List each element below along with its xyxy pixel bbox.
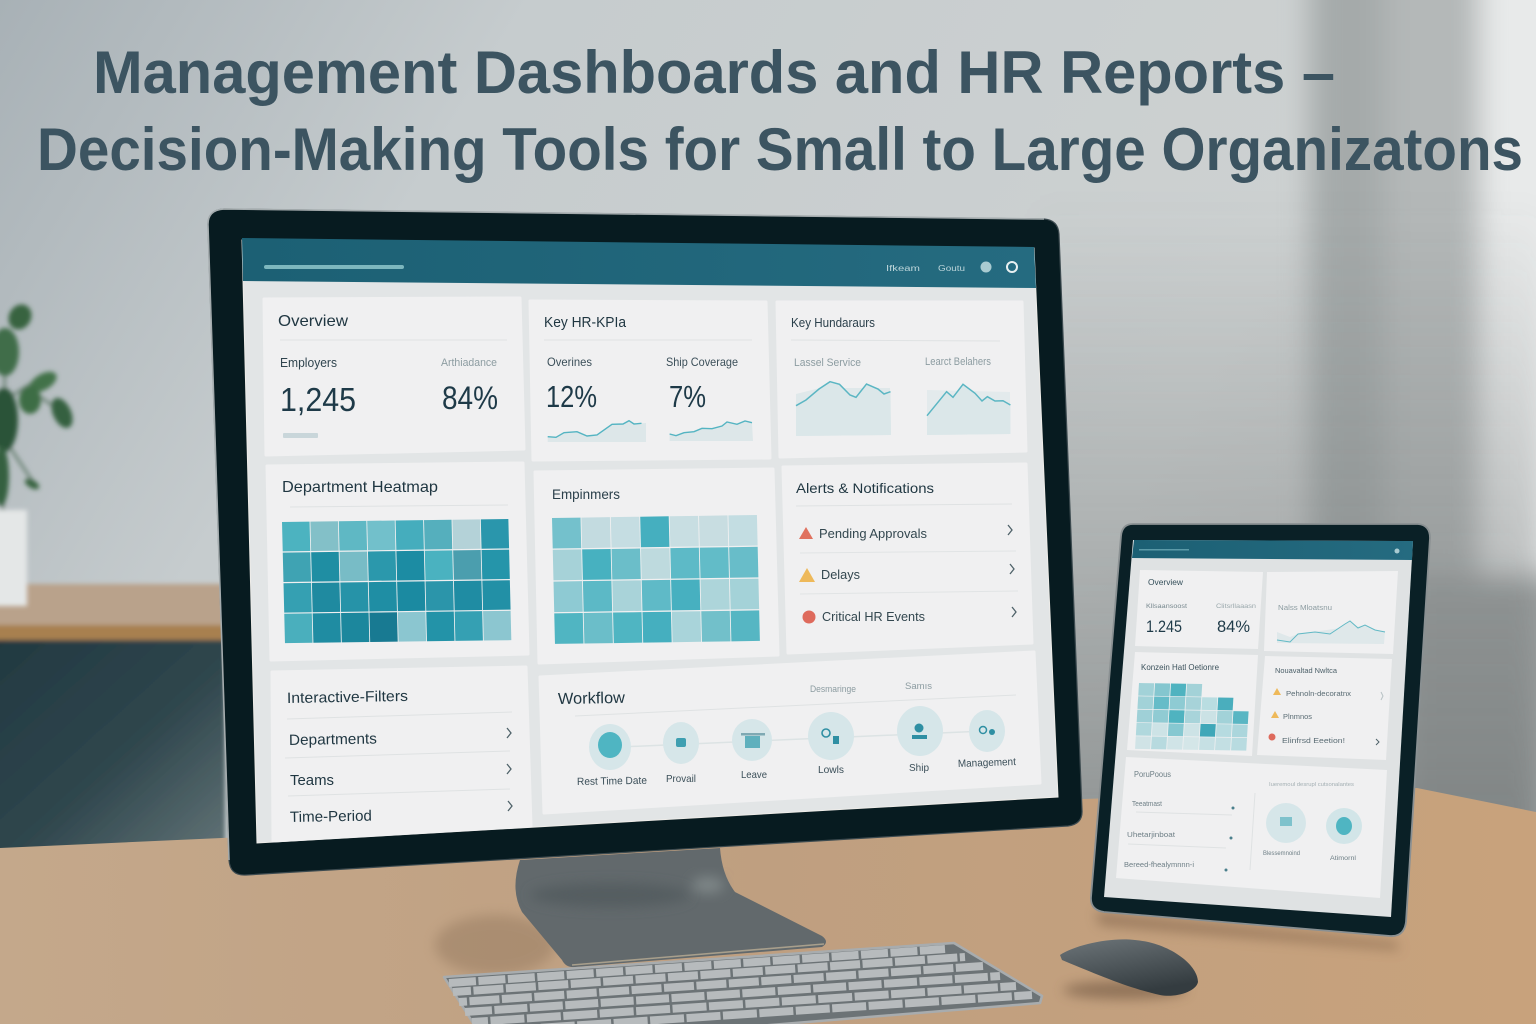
tablet panel: filters and workflow: Bereed-fhealymnnn-i: [1124, 860, 1194, 869]
step: lowls: Lowls: [818, 764, 844, 776]
tablet panel: filters and workflow: Iueremoul desrupl cutsonalantes: [1269, 782, 1354, 788]
panel: alerts and notifications: Critical HR Events: [822, 609, 925, 624]
panel: interactive filters: Teams: [290, 772, 334, 789]
tablet bezel: [1091, 524, 1430, 936]
step: management: [958, 710, 1016, 770]
monitor screen: [242, 240, 1058, 843]
tablet panel: notifications: [1257, 656, 1392, 760]
tablet panel: overview: 1.245: [1146, 618, 1182, 636]
monitor header bar: Ifkeam: [886, 264, 920, 273]
monitor header bar: Goutu: [938, 264, 965, 273]
panel: workflow: Desmaringe: [810, 684, 856, 695]
panel: alerts and notifications: Delays: [821, 567, 860, 582]
panel: key HR KPIs: Overines: [547, 355, 592, 369]
chevrons: [507, 728, 512, 811]
step: leave: [732, 719, 772, 781]
tablet panel: overview: [1135, 570, 1263, 649]
tablet panel: line chart: [1264, 571, 1398, 654]
tablet header: [1132, 540, 1413, 560]
panel: key hundaraurs: Learct Belahers: [925, 356, 991, 368]
keyboard: [444, 943, 1042, 1024]
panel: key HR KPIs: [530, 301, 770, 460]
step: ship: Ship: [909, 762, 929, 774]
panel: overview: 84%: [442, 380, 498, 416]
tablet panel: heatmap: [1127, 652, 1258, 756]
tablet heatmap grid: [1135, 683, 1250, 751]
panel: alerts and notifications: Alerts & Notifications: [796, 480, 934, 496]
panel: key HR KPIs: Key HR-KPIa: [544, 314, 627, 331]
tablet panel: notifications: Elinfrsd Eeetion!: [1282, 736, 1345, 745]
tablet panel: filters and workflow: Teeatmast: [1132, 799, 1163, 808]
panel: overview: 1,245: [280, 381, 356, 418]
panel: empinmers heatmap: [535, 469, 778, 663]
heatmap grid: [282, 519, 511, 643]
panel: alerts and notifications: Pending Approvals: [819, 526, 927, 541]
panel: interactive filters: [272, 667, 531, 841]
title: [37, 39, 1523, 183]
panel: interactive filters: Time-Period: [290, 808, 372, 826]
tablet panel: overview: Overview: [1148, 578, 1183, 587]
tablet: [1091, 524, 1430, 950]
tablet screen: [1104, 540, 1413, 917]
monitor: [208, 209, 1082, 875]
tablet panel: heatmap: Konzein Hatl Oetionre: [1141, 663, 1220, 672]
tablet panel: notifications: Nouavaltad Nwltca: [1275, 666, 1338, 675]
icon: red warning: [799, 527, 813, 539]
panel: workflow: Workflow: [558, 690, 626, 708]
icon: blurred plant: [0, 300, 77, 606]
tablet panel: notifications: Plnmnos: [1283, 712, 1312, 721]
icon: red alert: [802, 610, 816, 624]
panel: interactive filters: Interactive-Filters: [287, 688, 408, 707]
step: lowls: [808, 712, 854, 776]
panel: key hundaraurs: Key Hundaraurs: [791, 315, 875, 330]
icon: yellow warning: [799, 568, 815, 582]
panel: workflow: [540, 652, 1040, 813]
panel: workflow: Samıs: [905, 681, 932, 692]
monitor header bar: [242, 238, 1036, 288]
monitor bezel: [208, 209, 1082, 875]
step: provail: [663, 722, 699, 785]
tablet panel: overview: 84%: [1217, 618, 1250, 636]
tablet panel: filters and workflow: [1116, 757, 1387, 898]
mouse: [1060, 939, 1198, 999]
title: Management Dashboards and HR Reports –: [93, 39, 1335, 106]
monitor silver edge: [208, 209, 1044, 860]
monitor stand: [435, 848, 826, 975]
empinmers grid: [552, 515, 760, 644]
step: provail: Provail: [666, 773, 696, 785]
tablet panel: filters and workflow: Uhetarjinboat: [1127, 830, 1176, 839]
sparkline: overines: [548, 421, 646, 442]
panel: interactive filters: Departments: [289, 730, 377, 749]
panel: empinmers heatmap: Empinmers: [552, 486, 620, 502]
panel: key hundaraurs: Lassel Service: [794, 357, 861, 369]
step: rest time date: Rest Time Date: [577, 775, 647, 788]
tablet panel: line chart: Nalss Mloatsnu: [1278, 603, 1332, 612]
tablet shadow: [1095, 912, 1400, 950]
desk surface: [0, 788, 1536, 1024]
panel: overview: Arthiadance: [441, 357, 497, 369]
panel: overview: [264, 298, 524, 455]
tablet panel: filters and workflow: Atimornl: [1330, 855, 1357, 862]
panel: overview: Overview: [278, 313, 348, 330]
sparkline: ship coverage: [670, 421, 753, 441]
step: rest time date: [577, 724, 647, 788]
panel: department heatmap: Department Heatmap: [282, 479, 438, 496]
chevrons: [1008, 525, 1016, 617]
tablet panel: overview: Kllsaansoost: [1146, 604, 1187, 610]
tablet panel: notifications: Pehnoln-decoratnx: [1286, 689, 1351, 698]
step: ship: [897, 706, 943, 774]
tablet panel: filters and workflow: PoruPoous: [1134, 770, 1171, 779]
panel: key hundaraurs: [777, 302, 1026, 457]
step: leave: Leave: [741, 769, 767, 781]
tablet panel: filters and workflow: Blessemnoind: [1263, 851, 1300, 857]
panel: key HR KPIs: Ship Coverage: [666, 355, 738, 369]
background: shelf and dark cabinet: [0, 584, 225, 860]
panel: key HR KPIs: 7%: [669, 379, 706, 414]
step: management: Management: [958, 756, 1016, 770]
panel: overview: Employers: [280, 355, 337, 370]
chart: lassel service: [796, 382, 891, 436]
panel: department heatmap: [267, 463, 528, 660]
panel: key HR KPIs: 12%: [546, 379, 597, 414]
tablet panel: overview: Clitsrllaaasn: [1216, 604, 1256, 610]
panel: alerts and notifications: [783, 464, 1032, 653]
chart: learct belahers: [927, 384, 1010, 435]
